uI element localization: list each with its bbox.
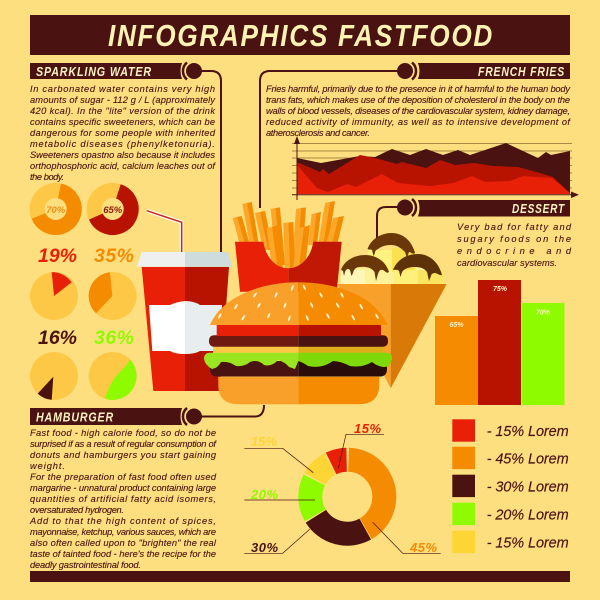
icon: hamburger	[204, 282, 392, 404]
heading: hamburger: HAMBURGER	[36, 410, 114, 424]
chocolate topping	[341, 233, 442, 281]
text block: hamburger: For the preparation of fast food often used	[30, 472, 217, 482]
text block: hamburger: weight.	[30, 461, 65, 471]
pie chart: 36%	[89, 327, 137, 400]
heading: dessert	[397, 199, 570, 216]
text block: hamburger: deadly gastrointestinal food.	[30, 560, 141, 570]
legend: - 20% Lorem	[487, 508, 569, 524]
text block: hamburger: mayonnaise, ketchup, various sauces, which are	[30, 527, 216, 537]
bar chart: dessert: 70%	[536, 310, 551, 316]
text block: french fries: reduced activity of immunity, as well as to intensive development of	[266, 117, 571, 127]
text block: hamburger: donuts and hamburgers you start gaining	[30, 450, 217, 460]
text block: hamburger: surprised if as a result of regular consumption of	[30, 439, 217, 449]
donut chart: fast food shares: 45%	[409, 540, 437, 555]
pie chart: 16%	[30, 327, 78, 400]
donut chart: fast food shares: 20%	[250, 487, 278, 502]
text block: dessert	[457, 222, 572, 268]
pie chart: 19%	[30, 245, 78, 320]
icon: french fries	[233, 201, 344, 292]
legend: - 30% Lorem	[487, 480, 569, 496]
legend: - 15% Lorem	[487, 424, 569, 440]
connector: dessert	[377, 207, 400, 238]
text block: sparkling water: contains specific sweeteners, which can be	[30, 117, 215, 127]
pie chart: 35%: 35%	[94, 245, 134, 267]
text block: hamburger: oversaturated hydrogen.	[30, 505, 124, 515]
connector: sparkling water	[200, 71, 221, 253]
text block: hamburger: Add to that the high content of spices,	[29, 516, 216, 526]
heading: french fries: FRENCH FRIES	[478, 65, 565, 79]
heading: dessert: DESSERT	[512, 202, 565, 216]
bar chart: dessert: 65%	[449, 322, 464, 329]
bar chart: dessert	[435, 280, 564, 405]
text block: sparkling water: dangerous for some people with inherited	[30, 128, 216, 138]
text block: hamburger: Fast food - high calorie food, so do not be	[30, 428, 216, 438]
text block: sparkling water: In carbonated water contains very high	[30, 84, 215, 94]
donut chart: 65%	[89, 186, 136, 232]
donut chart: 65%: 65%	[103, 205, 123, 216]
title banner: INFOGRAPHICS FASTFOOD	[108, 18, 494, 53]
heading: sparkling water	[30, 62, 202, 80]
text block: sparkling water: 420 kcal). In the "lite" version of the drink	[30, 106, 216, 116]
area chart: french fries	[292, 136, 579, 200]
pie chart: 19%: 19%	[38, 245, 77, 267]
legend	[452, 419, 569, 553]
connector: french fries	[260, 71, 400, 208]
sesame seeds	[217, 284, 379, 321]
text block: french fries: trans fats, which makes use of the deposition of cholesterol in the body on the	[266, 95, 570, 105]
donut chart: fast food shares: 30%	[251, 540, 278, 555]
donut chart: fast food shares: 15%	[354, 421, 381, 436]
text block: sparkling water: amounts of sugar - 112 g / L (approximately	[30, 95, 216, 105]
text block: french fries	[266, 84, 571, 138]
text block: hamburger	[29, 428, 217, 570]
legend: - 15% Lorem	[487, 536, 569, 552]
text block: hamburger: also often called upon to "brighten" the real	[30, 538, 217, 548]
text block: dessert: endocrine and	[457, 246, 572, 256]
pie chart: 16%: 16%	[38, 327, 77, 349]
pie chart: 36%: 36%	[94, 327, 134, 349]
legend: - 45% Lorem	[487, 452, 569, 468]
text block: french fries: Fries harmful, primarily due to the presence in it of harmful to the human body	[266, 84, 571, 94]
text block: hamburger: taste of tainted food - here's the recipe for the	[30, 549, 216, 559]
icon: ice cream cone	[337, 233, 447, 388]
text block: hamburger: quantities of artificial fatty acid isomers,	[30, 494, 216, 504]
bar chart: dessert: 75%	[493, 286, 508, 293]
heading: sparkling water: SPARKLING WATER	[36, 65, 152, 79]
text block: sparkling water: Sweeteners opastno also because it includes	[30, 150, 215, 160]
text block: french fries: walls of blood vessels, diseases of the cardiovascular system, kidney damage,	[266, 106, 570, 116]
donut chart: 70%	[34, 187, 78, 231]
donut chart: 70%: 70%	[46, 205, 66, 216]
heading: hamburger	[30, 408, 202, 425]
text block: dessert: cardiovascular systems.	[457, 258, 557, 268]
footer bar	[30, 571, 570, 582]
pie chart: 35%	[89, 245, 137, 320]
icon: soda cup	[137, 211, 232, 391]
text block: dessert: Very bad for fatty and	[457, 222, 572, 232]
text block: hamburger: margarine - unnatural product containing large	[30, 483, 216, 493]
donut chart: fast food shares	[244, 421, 441, 555]
donut chart: fast food shares: 15%	[251, 434, 277, 449]
text block: sparkling water	[30, 84, 216, 182]
text block: dessert: sugary foods on the	[457, 234, 571, 244]
connector: hamburger	[200, 405, 264, 416]
text block: sparkling water: orthophosphoric acid, calcium leaches out of	[30, 161, 216, 171]
text block: sparkling water: metabolic diseases (phenylketonuria).	[30, 139, 215, 149]
text block: french fries: atherosclerosis and cancer.	[266, 128, 370, 138]
text block: sparkling water: the body.	[30, 172, 64, 182]
heading: french fries	[397, 62, 570, 80]
